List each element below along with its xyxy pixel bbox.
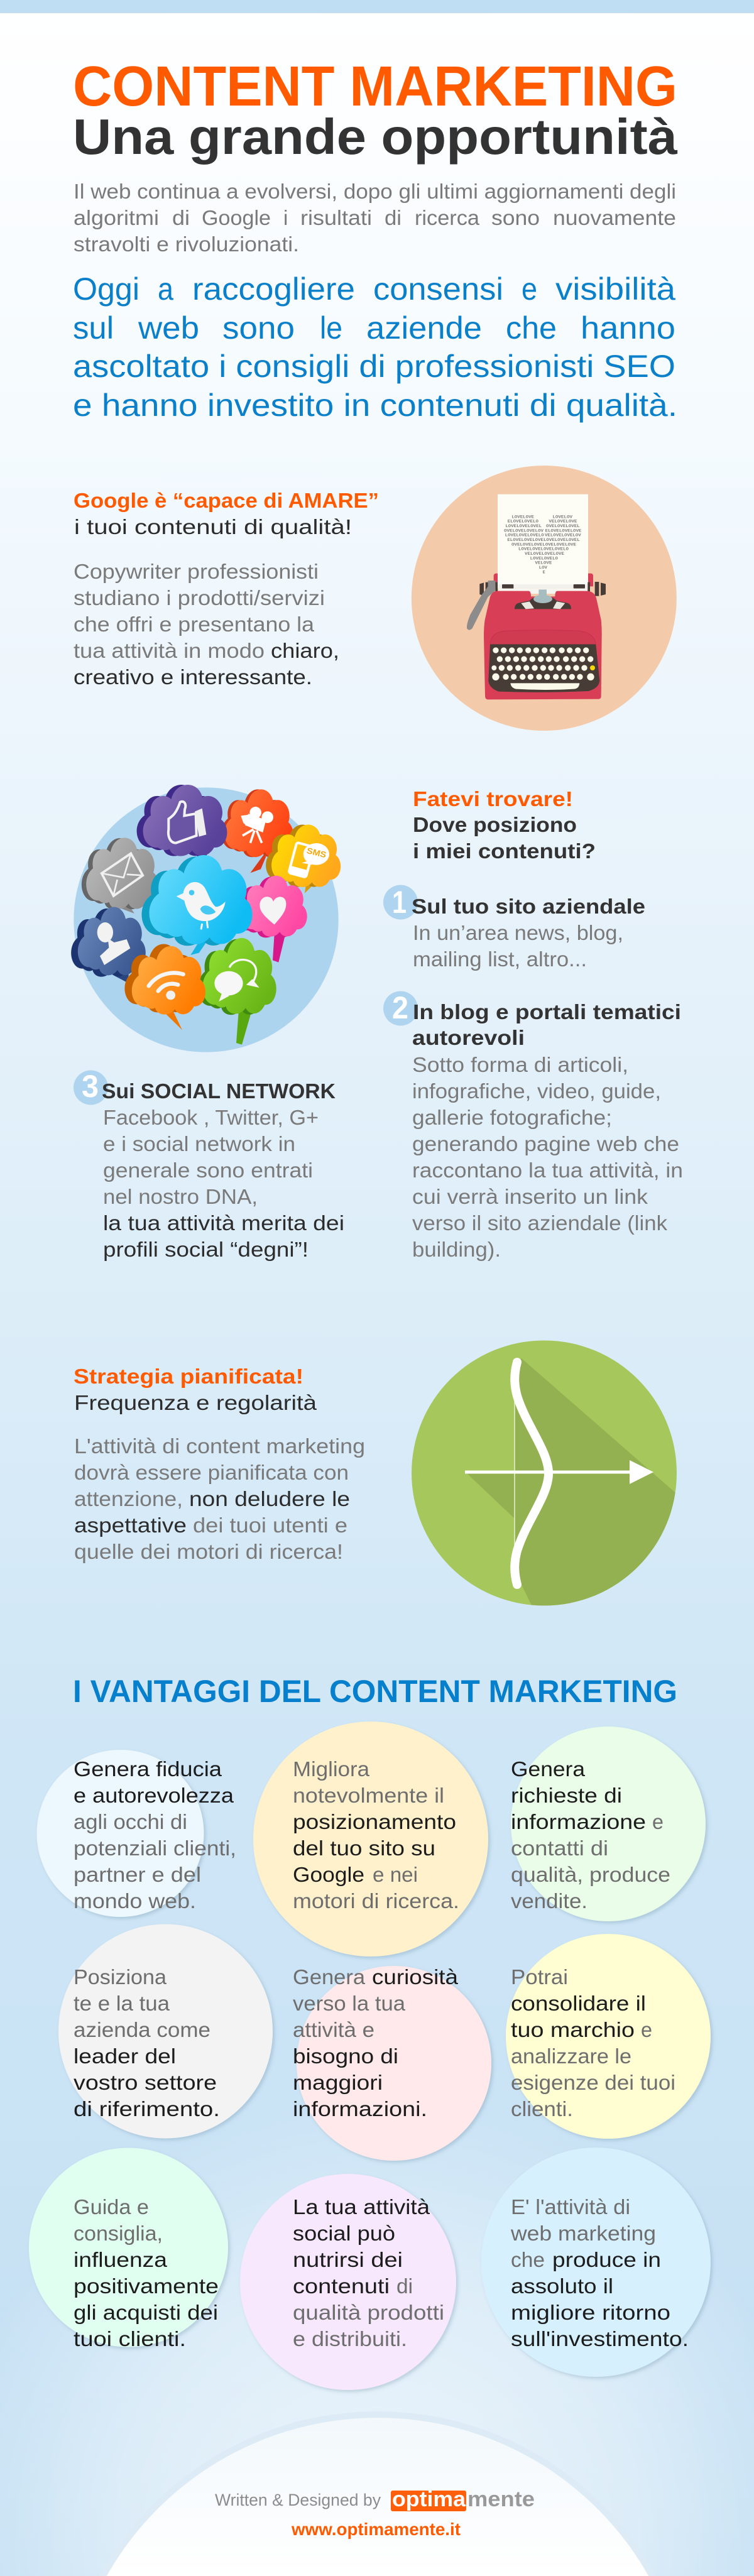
icon: typewriter in peach circle: ELOVELOVELO [508, 519, 538, 524]
text block: non deludere le [189, 1487, 350, 1510]
text block: dovrà essere pianificata con [74, 1461, 349, 1484]
heading [74, 1365, 317, 1414]
item 3: la tua attività merita dei [103, 1211, 344, 1235]
heading: Frequenza e regolarità [74, 1391, 317, 1414]
icon: navy person cloud [71, 907, 146, 982]
lead paragraph in blue: visibilità [555, 271, 675, 307]
benefit: richieste [511, 1727, 706, 1921]
heading: i miei contenuti? [413, 839, 596, 863]
text block: attenzione, [74, 1487, 183, 1510]
benefit: richieste: informazione [511, 1810, 646, 1833]
intro paragraph: di [172, 206, 190, 229]
footer dome [99, 2411, 656, 2576]
text block [74, 1434, 365, 1563]
benefit: influenza: gli acquisti dei [74, 2301, 218, 2324]
lead paragraph in blue: aziende [366, 310, 482, 346]
item 2: gallerie fotografiche; [412, 1106, 612, 1129]
icon: yellow SMS cloud [266, 824, 341, 893]
icon: typewriter in peach circle: OVELOVELOVELOVELOVELOVE [511, 542, 576, 547]
benefit: influenza: tuoi clienti. [74, 2327, 186, 2350]
benefit: leader: azienda come [74, 2018, 210, 2041]
item 2: cui verrà inserito un link [412, 1185, 648, 1208]
icon: blue bird cloud [142, 855, 253, 955]
benefit: fiducia [36, 1750, 236, 1917]
icon: typewriter in peach circle: E [543, 569, 545, 574]
benefit: ritorno [481, 2148, 711, 2377]
website url: www.optimamente.it [291, 2519, 461, 2539]
benefit: curiosità: Genera [293, 1965, 366, 1989]
lead paragraph in blue: sono [222, 310, 295, 346]
item 2: raccontano la tua attività, in [412, 1159, 683, 1182]
text block: dei tuoi utenti e [193, 1514, 347, 1537]
benefit: marchio [506, 1934, 711, 2139]
item 2: autorevoli [412, 1026, 525, 1049]
benefit: ritorno: sull'investimento. [511, 2327, 689, 2350]
benefit: marchio: esigenze dei tuoi [511, 2071, 675, 2094]
benefit: marchio: clienti. [511, 2097, 573, 2120]
item 3: profili social “degni”! [103, 1238, 309, 1261]
lead paragraph in blue: Oggi [73, 271, 139, 307]
benefit: ritorno: migliore ritorno [511, 2301, 670, 2324]
panel: benefits grid [29, 1722, 711, 2390]
heading: Strategia pianificata! [74, 1365, 303, 1388]
text block: chiaro, [271, 639, 339, 662]
text block: quelle dei motori di ricerca! [74, 1540, 343, 1563]
benefit: marchio: analizzare le [511, 2044, 631, 2068]
lead paragraph in blue: raccogliere [192, 271, 355, 307]
benefit: leader: Posiziona [74, 1965, 167, 1989]
benefit: social: La tua attività [293, 2195, 430, 2219]
heading: i vantaggi: I VANTAGGI DEL CONTENT MARKETING [73, 1674, 677, 1709]
benefit: marchio: tuo marchio [511, 2018, 635, 2041]
benefit: fiducia: agli occhi di [74, 1810, 187, 1833]
text block: tua attività in modo [74, 639, 265, 662]
icon: typewriter in peach circle: LOVELOVELOVELOVELO [518, 547, 569, 552]
lead paragraph in blue: che [506, 310, 557, 346]
item 3: 3 [82, 1069, 99, 1104]
benefit: posizionamento [253, 1722, 488, 1957]
intro paragraph: ricerca [415, 206, 480, 229]
icon: purple thumbs-up cloud [137, 785, 227, 863]
benefit: posizionamento: motori di ricerca. [293, 1889, 459, 1913]
benefit: curiosità: attività e [293, 2018, 374, 2041]
benefit: richieste: qualità, produce [511, 1863, 670, 1886]
footer glow [0, 2073, 754, 2576]
item 3: nel nostro DNA, [103, 1185, 258, 1208]
item 3: Facebook , Twitter, G+ [103, 1106, 319, 1129]
heading: i tuoi contenuti di qualità! [74, 515, 352, 538]
intro paragraph: i [283, 206, 288, 229]
item 2: 2 [392, 990, 408, 1025]
benefit: influenza: Guida e [74, 2195, 149, 2219]
benefit: influenza [29, 2148, 228, 2350]
icon: typewriter in peach circle: LOVELOV [552, 514, 572, 519]
benefit: social: social può [293, 2222, 395, 2245]
benefit: leader: di riferimento. [74, 2097, 220, 2120]
benefit: curiosità: bisogno di [293, 2044, 398, 2068]
intro paragraph: di [385, 206, 402, 229]
intro paragraph: Google [202, 206, 271, 229]
intro paragraph: risultati [300, 206, 372, 229]
benefit: posizionamento: Google [293, 1863, 364, 1886]
panel: Google capace di amare [74, 466, 677, 731]
text block [74, 560, 339, 689]
icon: typewriter in peach circle: VELOVE [535, 560, 552, 565]
icon: typewriter in peach circle: OVELOVELOVELOV [504, 528, 544, 533]
text block: L'attività di content marketing [74, 1434, 365, 1458]
benefit: richieste: Genera [511, 1757, 586, 1781]
benefit: leader: leader del [74, 2044, 176, 2068]
text block: aspettative [74, 1514, 187, 1537]
icon: red camera cloud [221, 789, 293, 873]
item 1 [383, 885, 645, 971]
benefit: ritorno: che [511, 2248, 545, 2271]
item 3 [74, 1069, 344, 1261]
benefit: fiducia: potenziali clienti, [74, 1836, 236, 1860]
lead paragraph in blue: ascoltato i consigli di professionisti SEO [73, 349, 675, 384]
heading: Google è “capace di AMARE” [74, 489, 379, 512]
lead paragraph in blue: le [320, 310, 342, 346]
item 2: generando pagine web che [412, 1132, 679, 1155]
benefit: leader: vostro settore [74, 2071, 217, 2094]
benefit: fiducia: partner e del [74, 1863, 201, 1886]
panel: social network illustration [71, 785, 341, 1052]
icon: typewriter in peach circle: VELOVELOVE [549, 519, 577, 524]
benefit: posizionamento: e nei [373, 1863, 418, 1886]
icon: typewriter in peach circle: ELOVELOVELOVELOVELOVELOVEL [507, 537, 580, 542]
benefit: marchio: e [641, 2018, 652, 2041]
benefit: social: nutrirsi dei [293, 2248, 403, 2271]
benefit: posizionamento: del tuo sito su [293, 1836, 435, 1860]
logo: optimamente [391, 2487, 535, 2511]
benefit: leader [58, 1924, 273, 2139]
benefit: curiosità: informazioni. [293, 2097, 427, 2120]
icon: typewriter in peach circle: LOVELOVE [511, 514, 534, 519]
logo: optimamente: optima [392, 2487, 466, 2511]
benefit: social: qualità prodotti [293, 2301, 444, 2324]
benefit: posizionamento: notevolmente il [293, 1784, 444, 1807]
benefit: influenza: influenza [74, 2248, 168, 2271]
intro paragraph [74, 180, 676, 256]
benefit: richieste: e [652, 1810, 664, 1833]
benefit: social: e distribuiti. [293, 2327, 407, 2350]
icon: typewriter in peach circle: VELOVELOVELOVE [525, 551, 564, 556]
lead paragraph in blue: hanno [581, 310, 675, 346]
heading: Dove posiziono [413, 813, 577, 836]
lead paragraph in blue: a [158, 271, 173, 307]
icon: typewriter in peach circle: LOVELOVELO [530, 555, 558, 560]
icon: typewriter in peach circle: LOVELOVELOVELO [505, 533, 544, 538]
benefit: influenza: consiglia, [74, 2222, 163, 2245]
intro paragraph: algoritmi [74, 206, 159, 229]
benefit: ritorno: produce in [552, 2248, 661, 2271]
benefit: ritorno: assoluto il [511, 2274, 613, 2298]
text block: che offri e presentano la [74, 613, 315, 636]
item 1: 1 [392, 885, 407, 920]
intro paragraph: sono [491, 206, 540, 229]
lead paragraph in blue: sul [73, 310, 114, 346]
item 2: infografiche, video, guide, [412, 1079, 661, 1103]
icon: pink heart cloud [236, 876, 307, 963]
icon: typewriter in peach circle: ELOVELOVELOVE [545, 528, 581, 533]
benefit: leader: te e la tua [74, 1992, 170, 2015]
intro paragraph: nuovamente [553, 206, 676, 229]
intro paragraph: stravolti e rivoluzionati. [74, 232, 299, 256]
benefit: fiducia: Genera fiducia [74, 1757, 222, 1781]
icon: yellow SMS cloud: SMS [306, 846, 327, 860]
top bar [0, 0, 754, 13]
benefit: curiosità [293, 1965, 491, 2161]
item 2: Sotto forma di articoli, [412, 1053, 628, 1076]
item 2: verso il sito aziendale (link [412, 1211, 668, 1235]
title: Una grande opportunità [73, 109, 678, 165]
benefit: richieste: contatti di [511, 1836, 608, 1860]
icon: grey mail cloud [82, 838, 158, 914]
heading [74, 489, 379, 538]
benefit: social: di [396, 2274, 413, 2298]
benefit: richieste: vendite. [511, 1889, 587, 1913]
benefit: influenza: positivamente [74, 2274, 219, 2298]
icon: green chat cloud [198, 938, 276, 1045]
benefit: fiducia: mondo web. [74, 1889, 196, 1913]
benefit: curiosità: curiosità [372, 1965, 459, 1989]
benefit: ritorno: web marketing [510, 2222, 656, 2245]
icon: bow and arrow in green circle [412, 1341, 677, 1606]
heading: Fatevi trovare! [413, 787, 573, 810]
icon: orange rss cloud [124, 944, 205, 1030]
item 3: generale sono entrati [103, 1159, 313, 1182]
text block: Copywriter professionisti [74, 560, 319, 583]
icon: typewriter in peach circle: VELOVELOVELOV [545, 533, 581, 538]
item 1: Sul tuo sito aziendale [412, 895, 645, 918]
benefit: fiducia: e autorevolezza [74, 1784, 234, 1807]
item 3: e i social network in [103, 1132, 295, 1155]
benefit: curiosità: maggiori [293, 2071, 383, 2094]
benefit: curiosità: verso la tua [293, 1992, 406, 2015]
item 2: In blog e portali tematici [413, 1000, 681, 1023]
blue circle backdrop [74, 787, 339, 1052]
item 3: Sui SOCIAL NETWORK [102, 1079, 336, 1103]
intro paragraph: Il web continua a evolversi, dopo gli ultimi aggiornamenti degli [74, 180, 676, 203]
icon: typewriter in peach circle [412, 466, 677, 731]
title [73, 55, 678, 165]
logo: optimamente: mente [467, 2487, 535, 2511]
panel: Fatevi trovare [74, 787, 683, 1261]
item 2: building). [412, 1238, 501, 1261]
benefit: social [240, 2174, 456, 2390]
benefit: posizionamento: Migliora [293, 1757, 370, 1781]
benefit: social: contenuti [293, 2274, 390, 2298]
benefit: marchio: Potrai [511, 1965, 568, 1989]
lead paragraph in blue: e [522, 271, 537, 307]
lead paragraph in blue: e hanno investito in contenuti di qualità. [73, 388, 677, 423]
text block: creativo e interessante. [74, 665, 312, 689]
benefit: posizionamento: posizionamento [293, 1810, 456, 1833]
lead paragraph in blue: consensi [373, 271, 503, 307]
icon: typewriter in peach circle: LOVELOVELOVEL [505, 523, 542, 528]
item 1: In un’area news, blog, [413, 921, 623, 944]
item 2 [383, 990, 683, 1261]
heading [413, 787, 596, 863]
text block: studiano i prodotti/servizi [74, 586, 325, 609]
icon: typewriter in peach circle: LOV [539, 565, 547, 570]
benefit: ritorno: E' l'attività di [511, 2195, 630, 2219]
icon: typewriter in peach circle: OVELOVELOVEL [546, 523, 580, 528]
benefit: richieste: richieste di [511, 1784, 622, 1807]
lead paragraph in blue: web [138, 310, 199, 346]
credit line: Written & Designed by [215, 2491, 381, 2509]
item 1: mailing list, altro... [413, 947, 587, 971]
lead paragraph in blue [73, 271, 677, 423]
title: CONTENT MARKETING [73, 55, 677, 118]
benefit: marchio: consolidare il [511, 1992, 646, 2015]
panel: Strategia pianificata [74, 1341, 677, 1606]
